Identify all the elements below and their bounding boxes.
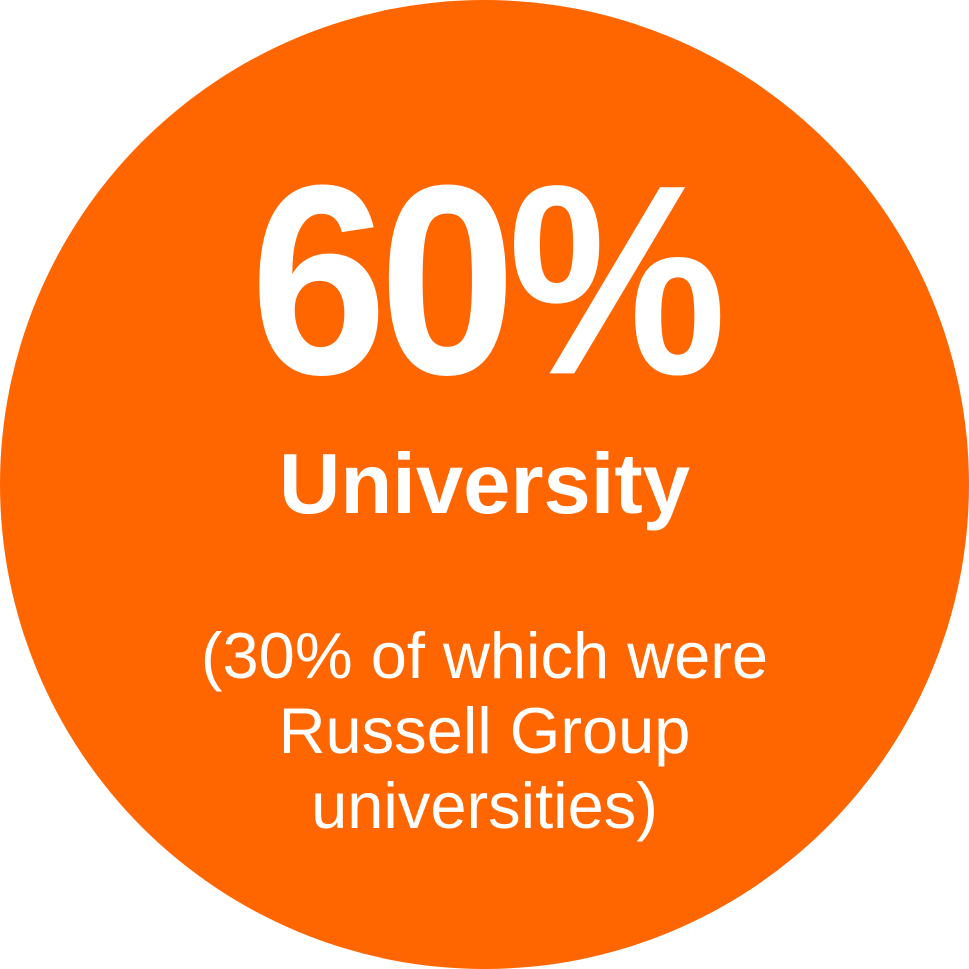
text block: note: Russell Group: [279, 694, 690, 767]
text block: note: universities): [311, 769, 658, 842]
subheading: University: University: [279, 437, 690, 532]
heading: 60%: 60%: [250, 129, 719, 432]
text block: note: [201, 619, 768, 842]
text block: note: (30% of which were: [201, 619, 768, 692]
